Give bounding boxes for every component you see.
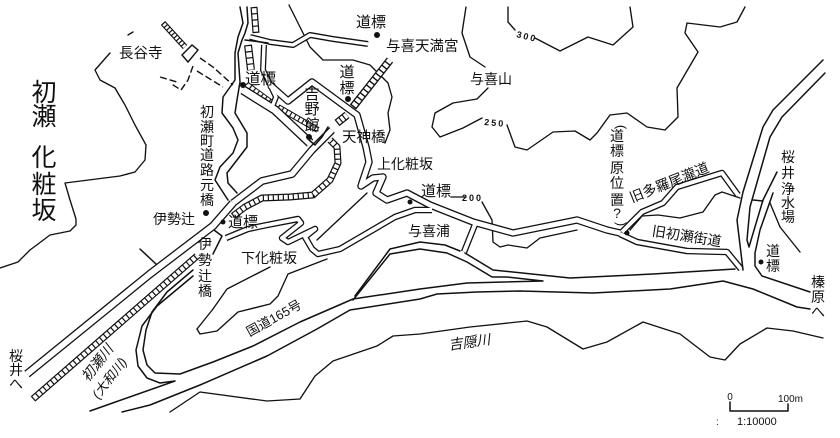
contour: 250 lower xyxy=(432,88,488,137)
label: Yoki Tenmangu: 与喜天満宮 xyxy=(386,38,458,55)
east road east edge xyxy=(747,73,825,247)
label: National Route 165: 国道165号 xyxy=(244,297,304,339)
label: signpost north: 道標 xyxy=(356,14,386,31)
title: 初瀬化粧坂 xyxy=(31,79,57,225)
scale bar: 1:10000 xyxy=(737,416,777,428)
road connector at block top xyxy=(245,40,268,43)
contour: 250 east xyxy=(507,7,745,150)
label: Isetsuji bridge: 伊勢辻橋 xyxy=(198,236,212,299)
river lower xyxy=(33,256,197,399)
label: old Hatsuse highway: 旧初瀬街道 xyxy=(651,223,723,249)
label: Hatsuse river: 初瀬川 xyxy=(78,340,118,384)
label: Yonabari river: 吉隠川 xyxy=(447,331,493,353)
label: old Tarao road: 旧多羅尾瀧道 xyxy=(627,159,711,206)
contour: 200 dash xyxy=(451,196,466,198)
label: signpost Isetsuji: 道標 xyxy=(228,214,258,231)
contour: west hillside xyxy=(128,32,133,35)
hatch near inn xyxy=(278,107,318,130)
contour: west ridge xyxy=(0,53,146,268)
east cross tick xyxy=(753,200,763,201)
label: Yoshino-kan: 吉野館 xyxy=(304,86,320,134)
contour: lower slope south xyxy=(197,259,327,334)
label: Yokiura: 与喜浦 xyxy=(408,223,450,239)
contour: mid valley xyxy=(630,192,740,230)
Route 165 south edge xyxy=(122,281,810,412)
contour: 250 upper xyxy=(462,7,485,67)
scale bar: : xyxy=(716,417,719,428)
railway ladder northeast xyxy=(353,60,390,107)
markers xyxy=(203,32,764,264)
label: Mt Yoki: 与喜山 xyxy=(470,71,512,87)
Hasedera steps xyxy=(163,23,185,47)
scale bar: 100m xyxy=(778,394,803,405)
highway side branch xyxy=(140,249,156,264)
inn frame xyxy=(309,127,328,145)
label: Sakurai water plant: 桜井浄水場 xyxy=(781,149,795,225)
contour label: 300: 300 xyxy=(516,29,538,44)
label: to Haibara: 榛原へ xyxy=(811,274,825,320)
label: Hasedera: 長谷寺 xyxy=(119,45,162,62)
contour label: 250: 250 xyxy=(484,117,506,129)
contour label: 200: 200 xyxy=(462,193,483,203)
road fill xyxy=(27,35,741,374)
label: signpost east: 道標 xyxy=(766,243,780,274)
Ise junction xyxy=(213,230,222,254)
label: town road origin: 初瀬町道路元橋 xyxy=(200,104,214,208)
ladder west block xyxy=(248,45,251,70)
contour: Yoki west xyxy=(289,5,392,143)
Hasedera precinct xyxy=(160,45,233,90)
outer loop road edge xyxy=(90,276,193,411)
hatch near marker xyxy=(250,87,272,103)
contour: 200 xyxy=(482,202,577,248)
wedge upper edge xyxy=(355,242,460,296)
label: signpost original position: ( xyxy=(614,125,629,130)
west road left edge xyxy=(215,7,243,200)
dashed paths xyxy=(160,58,233,90)
east road west edge xyxy=(737,60,823,270)
scale bar xyxy=(716,392,803,428)
label: signpost vertical: 道標 xyxy=(339,64,355,97)
east side road xyxy=(755,193,810,292)
Tenjin bridge hatch xyxy=(337,115,347,123)
contour: 300 west xyxy=(508,7,515,30)
label: signpost original position: 道標原位置? xyxy=(610,128,624,221)
river upper xyxy=(233,140,338,216)
west road right edge xyxy=(227,7,248,193)
label: Yamato river: (大和川) xyxy=(89,355,130,402)
label: signpost 200: 道標 xyxy=(421,183,451,200)
scale bar: 0 xyxy=(727,392,733,403)
label: signpost original position: ) xyxy=(614,222,629,226)
road casing xyxy=(27,35,741,374)
label: Upper Kewaizaka: 上化粧坂 xyxy=(377,156,433,172)
Route 165 inner loop edge xyxy=(143,249,543,374)
contour: 300 east xyxy=(535,7,633,51)
label: Isetsuji: 伊勢辻 xyxy=(153,211,195,227)
river: Yonabari xyxy=(170,321,823,412)
label: Lower Kewaizaka: 下化粧坂 xyxy=(241,250,297,266)
contour: central slope xyxy=(317,193,367,240)
label: to Sakurai: 桜井へ xyxy=(9,348,23,392)
temple box xyxy=(182,45,198,62)
Route 165 north edge xyxy=(465,253,735,278)
hatched river and bridges xyxy=(33,7,390,399)
contour: east valley xyxy=(770,203,800,252)
label: signpost west: 道標 xyxy=(245,70,276,88)
contour: lower slope north xyxy=(197,267,270,329)
label: signpost original position xyxy=(610,125,629,226)
ladder north road xyxy=(254,7,256,33)
label: Tenjin bridge: 天神橋 xyxy=(342,129,386,146)
